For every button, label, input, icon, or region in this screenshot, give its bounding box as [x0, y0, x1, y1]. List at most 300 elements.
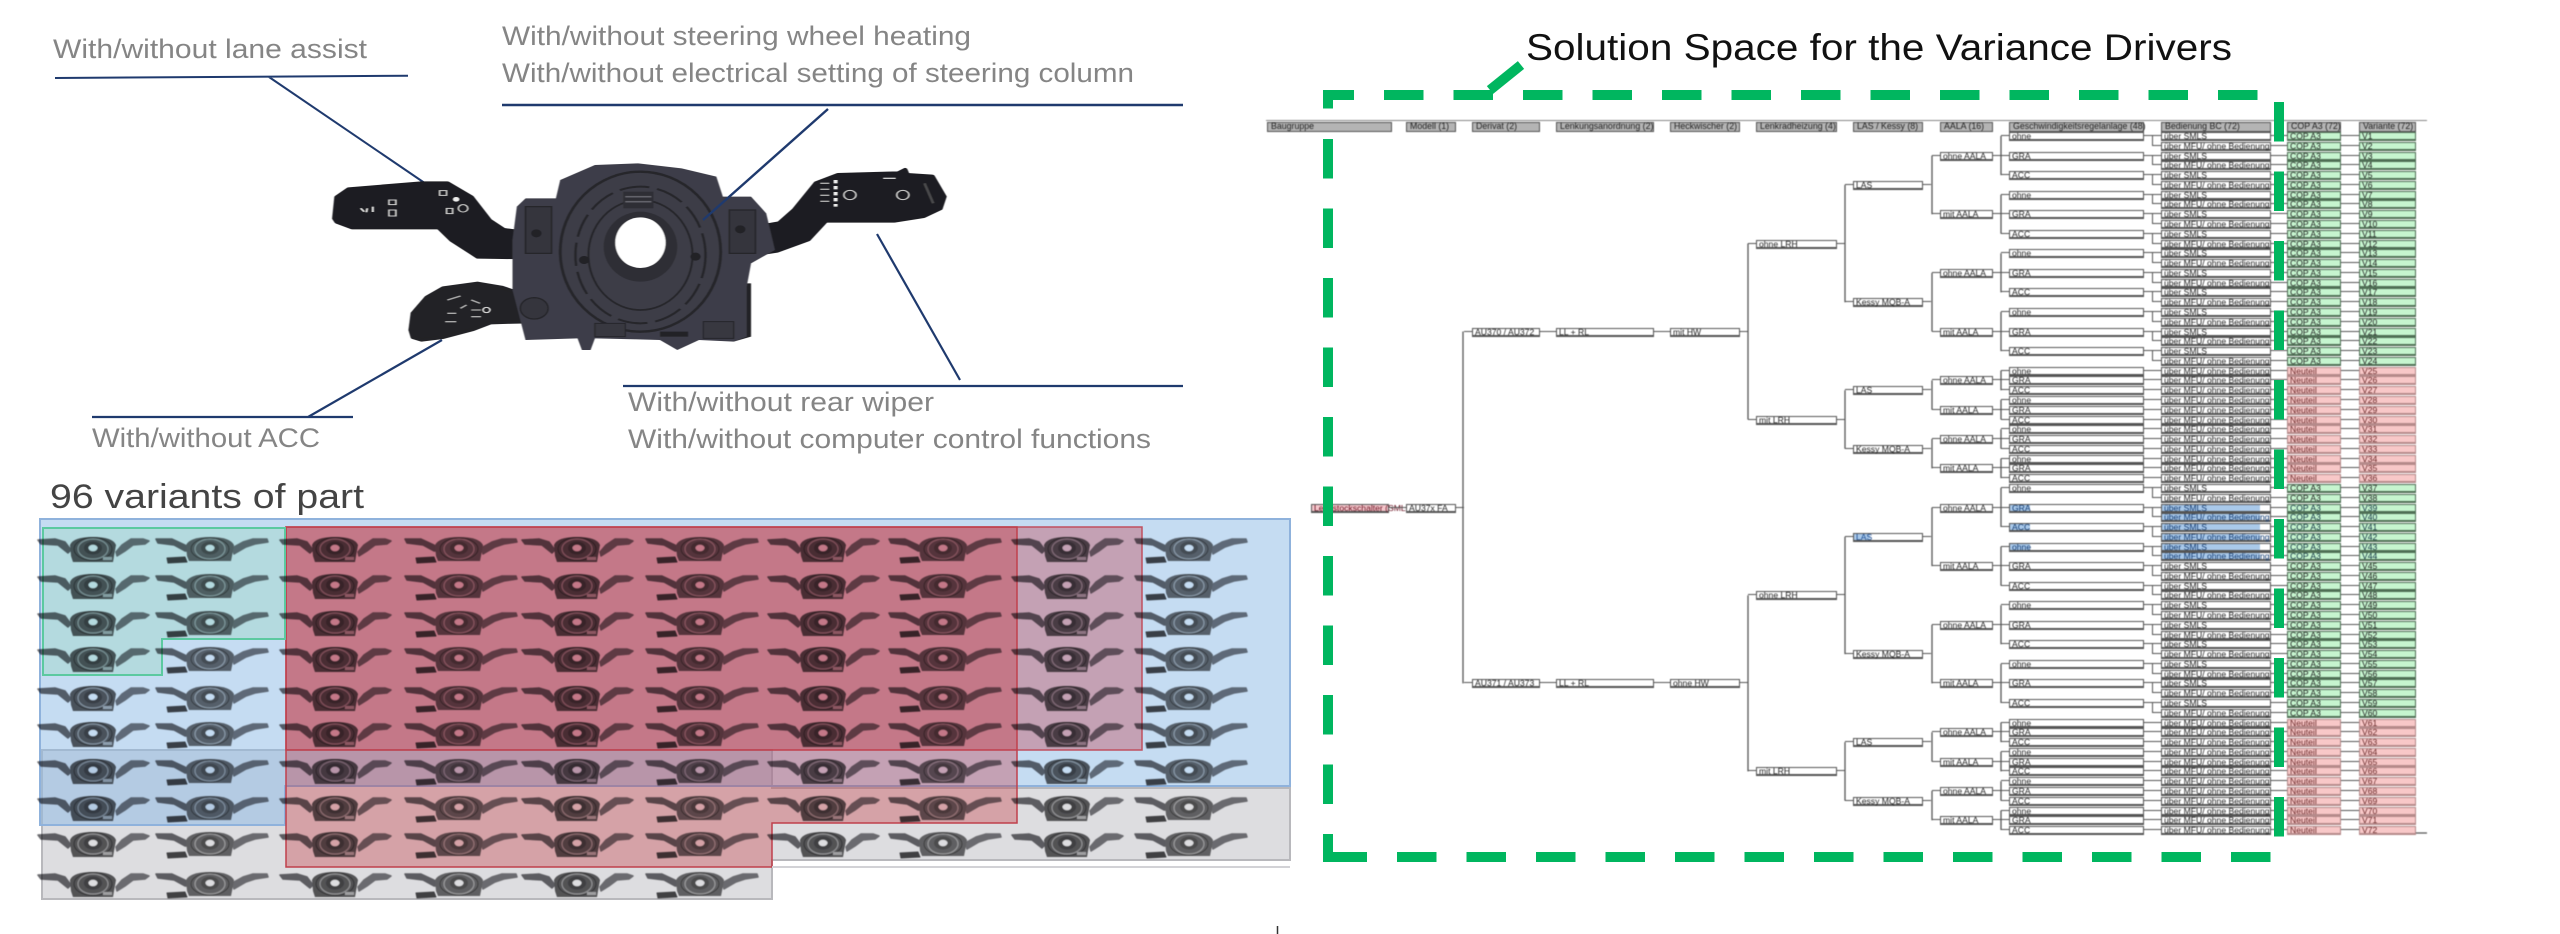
rows: variants V1 to V72: über MFU/ ohne Bedienung	[2164, 219, 2270, 229]
rows: variants V1 to V72: mit AALA	[1943, 561, 1978, 571]
rows: variants V1 to V72: Neuteil	[2290, 718, 2317, 728]
rows: variants V1 to V72: V42	[2362, 532, 2377, 542]
rows: variants V1 to V72: ACC	[2012, 522, 2030, 532]
rows: variants V1 to V72: über MFU/ ohne Bedienung	[2164, 414, 2270, 424]
rows: variants V1 to V72: V16	[2362, 278, 2377, 288]
rows: variants V1 to V72: COP A3	[2290, 268, 2321, 278]
rows: variants V1 to V72: GRA	[2012, 815, 2031, 825]
rows: variants V1 to V72: ohne AALA	[1943, 375, 1986, 385]
rows: variants V1 to V72: COP A3	[2290, 131, 2321, 141]
rows: variants V1 to V72: LL + RL	[1559, 678, 1589, 688]
rows: variants V1 to V72: V29	[2362, 405, 2377, 415]
rows: variants V1 to V72: COP A3	[2290, 649, 2321, 659]
rows: variants V1 to V72: Neuteil	[2290, 385, 2317, 395]
rows: variants V1 to V72: V9	[2362, 209, 2373, 219]
rows: variants V1 to V72: V56	[2362, 669, 2377, 679]
rows: variants V1 to V72: V19	[2362, 307, 2377, 317]
rows: variants V1 to V72: über MFU/ ohne Bedienung	[2164, 141, 2270, 151]
rows: variants V1 to V72: COP A3	[2290, 493, 2321, 503]
rows: variants V1 to V72: ACC	[2012, 698, 2030, 708]
rows: variants V1 to V72: über SMLS	[2164, 561, 2207, 571]
rows: variants V1 to V72: ACC	[2012, 766, 2030, 776]
header row: Geschwindigkeitsregelanlage (48)	[2013, 121, 2146, 131]
leader: lane assist	[55, 76, 432, 188]
header row: Modell (1)	[1410, 121, 1449, 131]
rows: variants V1 to V72: V36	[2362, 473, 2377, 483]
rows: variants V1 to V72: über MFU/ ohne Bedienung	[2164, 708, 2270, 718]
rows: variants V1 to V72: ohne	[2012, 806, 2031, 816]
header row: Bedienung BC (72)	[2165, 121, 2240, 131]
rows: variants V1 to V72: ACC	[2012, 825, 2030, 835]
rows: variants V1 to V72: über SMLS	[2164, 346, 2207, 356]
rows: variants V1 to V72: COP A3	[2290, 356, 2321, 366]
rows: variants V1 to V72: ACC	[2012, 444, 2030, 454]
rows: variants V1 to V72: Neuteil	[2290, 737, 2317, 747]
rows: variants V1 to V72: GRA	[2012, 326, 2031, 336]
rows: variants V1 to V72: über MFU/ ohne Bedienung	[2164, 737, 2270, 747]
rows: variants V1 to V72: ohne	[2012, 395, 2031, 405]
rows: variants V1 to V72: V1	[2362, 131, 2373, 141]
overlay: green group	[43, 528, 285, 675]
rows: variants V1 to V72: V54	[2362, 649, 2377, 659]
rows: variants V1 to V72: ohne AALA	[1943, 151, 1986, 161]
rows: variants V1 to V72: V72	[2362, 825, 2377, 835]
header row: Derivat (2)	[1476, 121, 1517, 131]
rows: variants V1 to V72: ohne	[2012, 600, 2031, 610]
rows: variants V1 to V72: ACC	[2012, 346, 2030, 356]
rows: variants V1 to V72: COP A3	[2290, 532, 2321, 542]
rows: variants V1 to V72: V61	[2362, 718, 2377, 728]
rows: variants V1 to V72: V32	[2362, 434, 2377, 444]
rows: variants V1 to V72: über SMLS	[2164, 248, 2207, 258]
rows: variants V1 to V72: über SMLS	[2164, 522, 2207, 532]
rows: variants V1 to V72: über MFU/ ohne Bedienung	[2164, 776, 2270, 786]
rows: variants V1 to V72: über SMLS	[2164, 659, 2207, 669]
header row: AALA (16)	[1944, 121, 1984, 131]
rows: variants V1 to V72: über MFU/ ohne Bedienung	[2164, 718, 2270, 728]
rows: variants V1 to V72: über MFU/ ohne Bedienung	[2164, 473, 2270, 483]
rows: variants V1 to V72: V2	[2362, 141, 2373, 151]
rows: variants V1 to V72: Neuteil	[2290, 806, 2317, 816]
rows: variants V1 to V72: über SMLS	[2164, 698, 2207, 708]
rows: variants V1 to V72: V26	[2362, 375, 2377, 385]
rows: variants V1 to V72: über SMLS	[2164, 170, 2207, 180]
rows: variants V1 to V72: mit HW	[1673, 326, 1701, 336]
rows: variants V1 to V72: V40	[2362, 512, 2377, 522]
rows: variants V1 to V72: Neuteil	[2290, 463, 2317, 473]
rows: variants V1 to V72: V4	[2362, 160, 2373, 170]
rows: variants V1 to V72: V30	[2362, 414, 2377, 424]
rows: variants V1 to V72: über MFU/ ohne Bedienung	[2164, 630, 2270, 640]
rows: variants V1 to V72: ohne	[2012, 424, 2031, 434]
rows: variants V1 to V72: ohne	[2012, 307, 2031, 317]
rows: variants V1 to V72: Neuteil	[2290, 796, 2317, 806]
rows: variants V1 to V72: AU370 / AU372	[1475, 326, 1534, 336]
rows: variants V1 to V72: mit AALA	[1943, 815, 1978, 825]
rows: variants V1 to V72: GRA	[2012, 786, 2031, 796]
rows: variants V1 to V72: V49	[2362, 600, 2377, 610]
rows: variants V1 to V72: V62	[2362, 727, 2377, 737]
rows: variants V1 to V72: über MFU/ ohne Bedienung	[2164, 258, 2270, 268]
rows: variants V1 to V72: COP A3	[2290, 238, 2321, 248]
rows: variants V1 to V72: über MFU/ ohne Bedienung	[2164, 590, 2270, 600]
header row: Baugruppe	[1271, 121, 1314, 131]
text: steering wheel heating label: With/without steering wheel heating	[502, 21, 971, 51]
rows: variants V1 to V72: über SMLS	[2164, 326, 2207, 336]
rows: variants V1 to V72: V67	[2362, 776, 2377, 786]
rows: variants V1 to V72: AU371 / AU373	[1475, 678, 1534, 688]
rows: variants V1 to V72: über MFU/ ohne Bedienung	[2164, 366, 2270, 376]
rows: variants V1 to V72: Neuteil	[2290, 786, 2317, 796]
rows: variants V1 to V72: GRA	[2012, 268, 2031, 278]
rows: variants V1 to V72: V53	[2362, 639, 2377, 649]
rows: variants V1 to V72: Lenkstockschalter (SMLS)	[1314, 502, 1414, 512]
rows: variants V1 to V72: Neuteil	[2290, 815, 2317, 825]
rows: variants V1 to V72: mit AALA	[1943, 463, 1978, 473]
rows: variants V1 to V72: ohne	[2012, 718, 2031, 728]
rows: variants V1 to V72: Neuteil	[2290, 395, 2317, 405]
heading: 96 variants of part: 96 variants of part	[50, 478, 365, 516]
rows: variants V1 to V72: ohne HW	[1673, 678, 1709, 688]
rows: variants V1 to V72: V22	[2362, 336, 2377, 346]
text: lane assist label: With/without lane assist	[53, 34, 368, 64]
rows: variants V1 to V72: Kessy MQB-A	[1856, 444, 1910, 454]
rows: variants V1 to V72: COP A3	[2290, 170, 2321, 180]
rows: variants V1 to V72: über MFU/ ohne Bedienung	[2164, 815, 2270, 825]
rows: variants V1 to V72: LAS	[1856, 532, 1872, 542]
rows: variants V1 to V72: V11	[2362, 229, 2377, 239]
rows: variants V1 to V72: V37	[2362, 483, 2377, 493]
rows: variants V1 to V72: V20	[2362, 317, 2377, 327]
rows: variants V1 to V72: COP A3	[2290, 542, 2321, 552]
rows: variants V1 to V72: COP A3	[2290, 229, 2321, 239]
rows: variants V1 to V72: über MFU/ ohne Bedienung	[2164, 405, 2270, 415]
rows: variants V1 to V72: COP A3	[2290, 190, 2321, 200]
rows: variants V1 to V72: V13	[2362, 248, 2377, 258]
rows: variants V1 to V72: COP A3	[2290, 141, 2321, 151]
rows: variants V1 to V72: V46	[2362, 571, 2377, 581]
rows: variants V1 to V72: V5	[2362, 170, 2373, 180]
rows: variants V1 to V72: Neuteil	[2290, 414, 2317, 424]
rows: variants V1 to V72: V39	[2362, 502, 2377, 512]
rows: variants V1 to V72: ohne	[2012, 454, 2031, 464]
rows: variants V1 to V72: über MFU/ ohne Bedienung	[2164, 649, 2270, 659]
rows: variants V1 to V72: V7	[2362, 190, 2373, 200]
rows: variants V1 to V72: ohne LRH	[1759, 590, 1798, 600]
rows: variants V1 to V72: COP A3	[2290, 551, 2321, 561]
rows: variants V1 to V72: ohne AALA	[1943, 786, 1986, 796]
rows: variants V1 to V72: ohne	[2012, 366, 2031, 376]
rows: variants V1 to V72: V44	[2362, 551, 2377, 561]
rows: variants V1 to V72: COP A3	[2290, 326, 2321, 336]
rows: variants V1 to V72: über MFU/ ohne Bedienung	[2164, 160, 2270, 170]
rows: variants V1 to V72: V18	[2362, 297, 2377, 307]
rows: variants V1 to V72: V31	[2362, 424, 2377, 434]
rows: variants V1 to V72: über MFU/ ohne Bedienung	[2164, 356, 2270, 366]
rows: variants V1 to V72: ohne AALA	[1943, 434, 1986, 444]
rows: variants V1 to V72: Neuteil	[2290, 747, 2317, 757]
rows: variants V1 to V72: über MFU/ ohne Bedienung	[2164, 463, 2270, 473]
rows: variants V1 to V72: V25	[2362, 366, 2377, 376]
rows: variants V1 to V72: über SMLS	[2164, 268, 2207, 278]
rows: variants V1 to V72: COP A3	[2290, 219, 2321, 229]
rows: variants V1 to V72: über MFU/ ohne Bedienung	[2164, 297, 2270, 307]
rows: variants V1 to V72: ACC	[2012, 737, 2030, 747]
rows: variants V1 to V72: GRA	[2012, 434, 2031, 444]
rows: variants V1 to V72: GRA	[2012, 405, 2031, 415]
header row	[1266, 119, 2428, 133]
rows: variants V1 to V72: COP A3	[2290, 502, 2321, 512]
rows: variants V1 to V72: Neuteil	[2290, 776, 2317, 786]
rows: variants V1 to V72: über SMLS	[2164, 209, 2207, 219]
rows: variants V1 to V72: ohne AALA	[1943, 727, 1986, 737]
rows: variants V1 to V72: über SMLS	[2164, 542, 2207, 552]
text: computer control label: With/without computer control functions	[628, 424, 1151, 454]
rows: variants V1 to V72: über MFU/ ohne Bedienung	[2164, 766, 2270, 776]
rows: variants V1 to V72: COP A3	[2290, 620, 2321, 630]
rows: variants V1 to V72: über MFU/ ohne Bedienung	[2164, 747, 2270, 757]
rows: variants V1 to V72: COP A3	[2290, 199, 2321, 209]
rows: variants V1 to V72: ohne	[2012, 776, 2031, 786]
rows: variants V1 to V72: über MFU/ ohne Bedienung	[2164, 434, 2270, 444]
rows: variants V1 to V72: V45	[2362, 561, 2377, 571]
rows: variants V1 to V72: mit AALA	[1943, 326, 1978, 336]
leader: steering column	[502, 105, 1183, 220]
rows: variants V1 to V72: LAS	[1856, 180, 1872, 190]
header row: Lenkradheizung (4)	[1760, 121, 1836, 131]
rows: variants V1 to V72: mit AALA	[1943, 757, 1978, 767]
rows: variants V1 to V72: über MFU/ ohne Bedienung	[2164, 796, 2270, 806]
rows: variants V1 to V72: COP A3	[2290, 571, 2321, 581]
rows: variants V1 to V72: COP A3	[2290, 180, 2321, 190]
rows: variants V1 to V72: Neuteil	[2290, 757, 2317, 767]
rows: variants V1 to V72: V24	[2362, 356, 2377, 366]
rows: variants V1 to V72: über MFU/ ohne Bedienung	[2164, 180, 2270, 190]
rows: variants V1 to V72: ACC	[2012, 796, 2030, 806]
overlay: red group wide	[286, 527, 1142, 750]
rows: variants V1 to V72: mit AALA	[1943, 209, 1978, 219]
rows: variants V1 to V72: V64	[2362, 747, 2377, 757]
rows: variants V1 to V72: COP A3	[2290, 278, 2321, 288]
rows: variants V1 to V72: LAS	[1856, 385, 1872, 395]
rows: variants V1 to V72: Neuteil	[2290, 405, 2317, 415]
rows: variants V1 to V72: über MFU/ ohne Bedienung	[2164, 199, 2270, 209]
rows: variants V1 to V72: über SMLS	[2164, 678, 2207, 688]
rows: variants V1 to V72: über MFU/ ohne Bedienung	[2164, 512, 2270, 522]
rows: variants V1 to V72: V47	[2362, 581, 2377, 591]
rows: variants V1 to V72: COP A3	[2290, 160, 2321, 170]
rows: variants V1 to V72: Neuteil	[2290, 766, 2317, 776]
rows: variants V1 to V72: LL + RL	[1559, 326, 1589, 336]
overlay: grey group	[42, 750, 1290, 899]
rows: variants V1 to V72: COP A3	[2290, 209, 2321, 219]
rows: variants V1 to V72: V10	[2362, 219, 2377, 229]
rows: variants V1 to V72: V23	[2362, 346, 2377, 356]
rows: variants V1 to V72: GRA	[2012, 151, 2031, 161]
rows: variants V1 to V72: V43	[2362, 542, 2377, 552]
rows: variants V1 to V72: COP A3	[2290, 561, 2321, 571]
rows: variants V1 to V72: über SMLS	[2164, 151, 2207, 161]
rows: variants V1 to V72: GRA	[2012, 757, 2031, 767]
rows: variants V1 to V72: Kessy MQB-A	[1856, 297, 1910, 307]
rows: variants V1 to V72: über MFU/ ohne Bedienung	[2164, 532, 2270, 542]
text: ACC label: With/without ACC	[92, 423, 320, 453]
rows: variants V1 to V72: GRA	[2012, 375, 2031, 385]
rows: variants V1 to V72: V55	[2362, 659, 2377, 669]
rows: variants V1 to V72: ohne AALA	[1943, 502, 1986, 512]
rows: variants V1 to V72: COP A3	[2290, 317, 2321, 327]
rows: variants V1 to V72: ACC	[2012, 229, 2030, 239]
rows: variants V1 to V72: V66	[2362, 766, 2377, 776]
rows: variants V1 to V72: GRA	[2012, 463, 2031, 473]
rows: variants V1 to V72: GRA	[2012, 678, 2031, 688]
rows: variants V1 to V72: V28	[2362, 395, 2377, 405]
rows: variants V1 to V72: ohne	[2012, 131, 2031, 141]
rows: variants V1 to V72: V48	[2362, 590, 2377, 600]
rows: variants V1 to V72: ohne AALA	[1943, 268, 1986, 278]
rows: variants V1 to V72: COP A3	[2290, 151, 2321, 161]
text: rear wiper label: With/without rear wiper	[628, 387, 934, 417]
rows: variants V1 to V72: V71	[2362, 815, 2377, 825]
rows: variants V1 to V72: COP A3	[2290, 610, 2321, 620]
overlay: blue group	[40, 519, 1290, 825]
rows: variants V1 to V72: Kessy MQB-A	[1856, 649, 1910, 659]
rows: variants V1 to V72: V17	[2362, 287, 2377, 297]
rows: variants V1 to V72: V59	[2362, 698, 2377, 708]
rows: variants V1 to V72: COP A3	[2290, 708, 2321, 718]
rows: variants V1 to V72: V58	[2362, 688, 2377, 698]
rows: variants V1 to V72: V69	[2362, 796, 2377, 806]
header row: Heckwischer (2)	[1674, 121, 1737, 131]
leader: ACC	[92, 340, 442, 417]
rows: variants V1 to V72: COP A3	[2290, 287, 2321, 297]
rows: variants V1 to V72: V38	[2362, 493, 2377, 503]
rows: variants V1 to V72: über MFU/ ohne Bedienung	[2164, 454, 2270, 464]
rows: variants V1 to V72: COP A3	[2290, 630, 2321, 640]
rows: variants V1 to V72: COP A3	[2290, 248, 2321, 258]
header row: LAS / Kessy (8)	[1857, 121, 1918, 131]
rows: variants V1 to V72: ohne	[2012, 248, 2031, 258]
rows: variants V1 to V72: COP A3	[2290, 659, 2321, 669]
rows: variants V1 to V72: mit AALA	[1943, 678, 1978, 688]
rows: variants V1 to V72: über MFU/ ohne Bedienung	[2164, 551, 2270, 561]
rows: variants V1 to V72: Kessy MQB-A	[1856, 796, 1910, 806]
rows: variants V1 to V72: V51	[2362, 620, 2377, 630]
rows: variants V1 to V72: Neuteil	[2290, 825, 2317, 835]
rows: variants V1 to V72: ACC	[2012, 414, 2030, 424]
rows: variants V1 to V72: über SMLS	[2164, 131, 2207, 141]
rows: variants V1 to V72: V60	[2362, 708, 2377, 718]
rows: variants V1 to V72: V57	[2362, 678, 2377, 688]
rows: variants V1 to V72: V33	[2362, 444, 2377, 454]
rows: variants V1 to V72: ohne	[2012, 190, 2031, 200]
rows: variants V1 to V72: COP A3	[2290, 346, 2321, 356]
rows: variants V1 to V72: über SMLS	[2164, 229, 2207, 239]
rows: variants V1 to V72: ACC	[2012, 473, 2030, 483]
rows: variants V1 to V72: Neuteil	[2290, 375, 2317, 385]
rows: variants V1 to V72: über MFU/ ohne Bedienung	[2164, 238, 2270, 248]
rows: variants V1 to V72: mit LRH	[1759, 414, 1790, 424]
rows: variants V1 to V72: V63	[2362, 737, 2377, 747]
rows: variants V1 to V72: COP A3	[2290, 336, 2321, 346]
rows: variants V1 to V72: über SMLS	[2164, 600, 2207, 610]
rows: variants V1 to V72: über MFU/ ohne Bedienung	[2164, 688, 2270, 698]
rows: variants V1 to V72: GRA	[2012, 620, 2031, 630]
rows: variants V1 to V72: über SMLS	[2164, 620, 2207, 630]
rows: variants V1 to V72: über SMLS	[2164, 639, 2207, 649]
rows: variants V1 to V72: COP A3	[2290, 688, 2321, 698]
rows: variants V1 to V72: über MFU/ ohne Bedienung	[2164, 375, 2270, 385]
rows: variants V1 to V72: V34	[2362, 454, 2377, 464]
rows: variants V1 to V72: Neuteil	[2290, 444, 2317, 454]
rows: variants V1 to V72: COP A3	[2290, 590, 2321, 600]
rows: variants V1 to V72: über MFU/ ohne Bedienung	[2164, 806, 2270, 816]
rows: variants V1 to V72: V6	[2362, 180, 2373, 190]
rows: variants V1 to V72: GRA	[2012, 502, 2031, 512]
rows: variants V1 to V72: COP A3	[2290, 581, 2321, 591]
rows: variants V1 to V72: über MFU/ ohne Bedienung	[2164, 278, 2270, 288]
rows: variants V1 to V72: COP A3	[2290, 297, 2321, 307]
rows: variants V1 to V72: Neuteil	[2290, 366, 2317, 376]
text: steering column label: With/without electrical setting of steering column	[502, 58, 1134, 88]
rows: variants V1 to V72: V52	[2362, 630, 2377, 640]
leader: rear wiper	[623, 234, 1183, 386]
rows: variants V1 to V72: über MFU/ ohne Bedienung	[2164, 493, 2270, 503]
rows: variants V1 to V72: ohne	[2012, 747, 2031, 757]
rows: variants V1 to V72: über MFU/ ohne Bedienung	[2164, 444, 2270, 454]
grid: 96 part variants	[38, 537, 1247, 898]
rows: variants V1 to V72: über MFU/ ohne Bedienung	[2164, 424, 2270, 434]
rows: variants V1 to V72: ACC	[2012, 385, 2030, 395]
rows: variants V1 to V72: V14	[2362, 258, 2377, 268]
rows: variants V1 to V72: V68	[2362, 786, 2377, 796]
rows: variants V1 to V72: V8	[2362, 199, 2373, 209]
rows: variants V1 to V72: ohne LRH	[1759, 238, 1798, 248]
rows: variants V1 to V72: über SMLS	[2164, 502, 2207, 512]
rows: variants V1 to V72: Neuteil	[2290, 424, 2317, 434]
rows: variants V1 to V72: GRA	[2012, 727, 2031, 737]
rows: variants V1 to V72: V15	[2362, 268, 2377, 278]
rows: variants V1 to V72: COP A3	[2290, 639, 2321, 649]
header row: Variante (72)	[2363, 121, 2413, 131]
rows: variants V1 to V72: über SMLS	[2164, 581, 2207, 591]
rows: variants V1 to V72: AU37x FA	[1409, 502, 1448, 512]
rows: variants V1 to V72: ohne AALA	[1943, 620, 1986, 630]
rows: variants V1 to V72: V21	[2362, 326, 2377, 336]
heading: solution space title: Solution Space for the Variance Drivers	[1526, 27, 2232, 68]
rows: variants V1 to V72: über MFU/ ohne Bedienung	[2164, 727, 2270, 737]
header row: Lenkungsanordnung (2)	[1560, 121, 1653, 131]
rows: variants V1 to V72: über SMLS	[2164, 287, 2207, 297]
rows: variants V1 to V72: ACC	[2012, 639, 2030, 649]
rows: variants V1 to V72: V3	[2362, 151, 2373, 161]
rows: variants V1 to V72: COP A3	[2290, 698, 2321, 708]
rows: variants V1 to V72: GRA	[2012, 209, 2031, 219]
rows: variants V1 to V72: COP A3	[2290, 522, 2321, 532]
rows: variants V1 to V72: Neuteil	[2290, 454, 2317, 464]
rows: variants V1 to V72: mit LRH	[1759, 766, 1790, 776]
image: steering column switch part	[335, 163, 944, 350]
rows: variants V1 to V72: V35	[2362, 463, 2377, 473]
rows: variants V1 to V72: über MFU/ ohne Bedienung	[2164, 571, 2270, 581]
rows: variants V1 to V72: COP A3	[2290, 512, 2321, 522]
rows: variants V1 to V72: Neuteil	[2290, 727, 2317, 737]
rows: variants V1 to V72: ohne	[2012, 542, 2031, 552]
rows: variants V1 to V72: über SMLS	[2164, 307, 2207, 317]
rows: variants V1 to V72: mit AALA	[1943, 405, 1978, 415]
rows: variants V1 to V72: ACC	[2012, 170, 2030, 180]
overlay: red group stepped	[286, 527, 1017, 867]
